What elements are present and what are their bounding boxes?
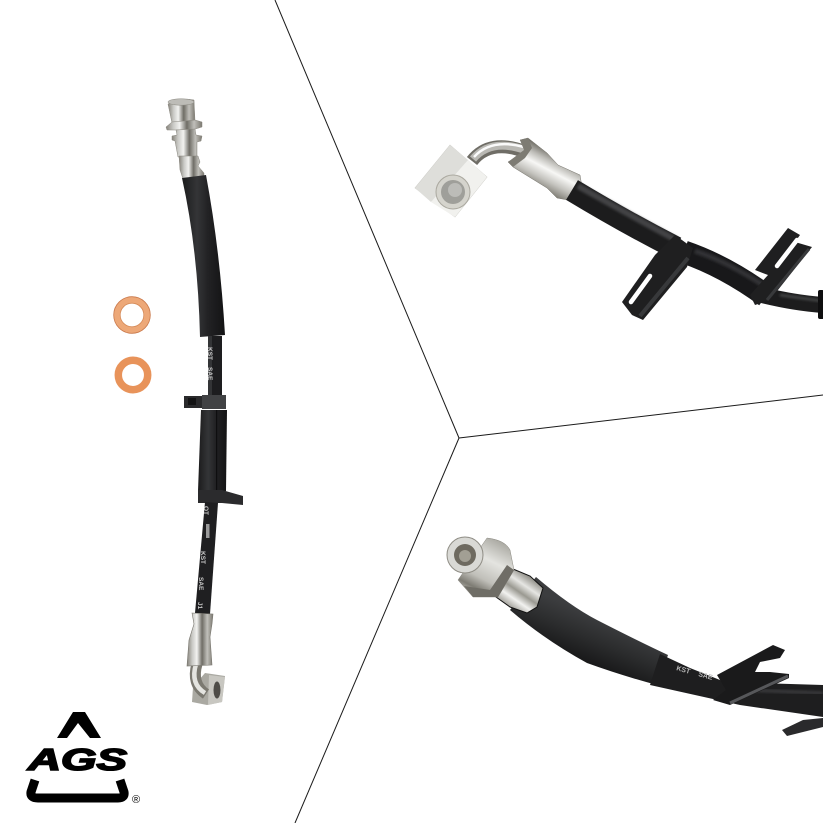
hose marking OT KST SAE J: SAE — [197, 577, 204, 591]
protective sleeve — [684, 251, 766, 296]
crimped ferrule — [508, 138, 582, 200]
threaded fitting — [447, 537, 543, 613]
copper washer upper — [114, 297, 150, 333]
marking KST SAE: KST — [675, 665, 692, 676]
thin hose section upper — [206, 336, 222, 396]
logo wordmark: AGS — [27, 742, 127, 777]
logo base — [31, 780, 124, 798]
upper protective sleeve — [182, 175, 225, 337]
thin hose section lower — [195, 502, 218, 614]
copper washer lower — [118, 360, 148, 390]
lower hose clip — [198, 490, 243, 505]
marking KST SAE — [675, 665, 714, 682]
ribbed hose — [572, 186, 676, 248]
marking KST SAE: SAE — [697, 671, 714, 682]
close-up: banjo end with clips — [415, 138, 823, 320]
hose marking KST SAE — [206, 347, 213, 381]
hose marking KST SAE: SAE — [206, 367, 213, 381]
clip main — [713, 645, 789, 705]
thin hose end — [762, 290, 823, 319]
protective sleeve — [510, 577, 668, 685]
full brake hose view — [166, 99, 243, 705]
hose marking OT KST SAE J: OT — [202, 506, 209, 515]
hose with markings — [650, 654, 823, 717]
hose marking OT KST SAE J — [196, 506, 210, 610]
clip lower — [782, 718, 823, 736]
upper hose clip — [184, 395, 226, 409]
bent steel tube — [472, 144, 526, 161]
bottom banjo fitting — [187, 613, 225, 705]
clip left — [622, 235, 693, 320]
clip right — [750, 228, 812, 305]
hose marking OT KST SAE J: J1 — [196, 602, 203, 610]
AGS logo — [27, 712, 140, 806]
divider lines — [275, 0, 823, 823]
hose marking KST SAE: KST — [206, 347, 213, 360]
top banjo fitting — [166, 99, 204, 179]
banjo block — [415, 145, 487, 217]
lower protective sleeve — [198, 410, 227, 491]
hose marking OT KST SAE J: KST — [199, 551, 206, 564]
registered mark: ® — [132, 794, 140, 806]
logo chevron — [57, 712, 101, 738]
close-up: threaded end with clip — [447, 537, 823, 736]
